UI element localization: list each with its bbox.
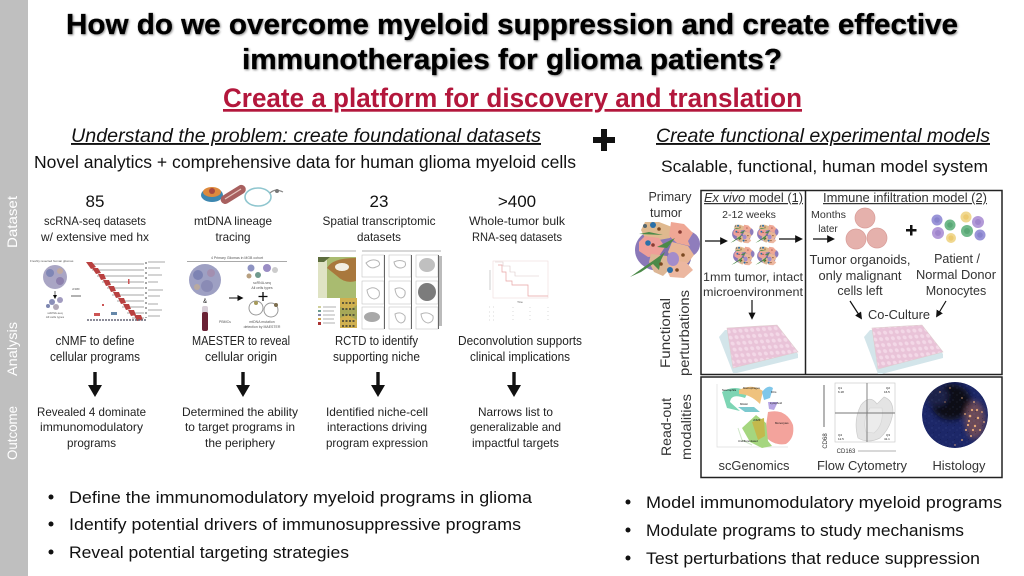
figure: MAESTER workflow — [187, 256, 287, 331]
label: functional perturbations — [657, 290, 692, 376]
title: How do we overcome myeloid suppression and create effective — [66, 9, 958, 41]
icon: well plate 1 — [719, 325, 798, 373]
arrow — [507, 372, 521, 397]
label: scGenomics: scGenomics — [718, 459, 790, 473]
chart: flow cytometry: Q3 — [886, 433, 890, 437]
label: read-out modalities: modalities — [678, 394, 694, 460]
left bullet list: Reveal potential targeting strategies — [69, 544, 349, 562]
title — [66, 9, 958, 76]
panel: column 1 scRNA-seq: programs — [67, 436, 116, 450]
figure: MAESTER workflow: & — [203, 299, 207, 305]
panel: column 2 mtDNA: to target programs in — [185, 420, 295, 434]
panel: column 4 bulk — [458, 192, 582, 450]
icon: tumor organoids — [846, 208, 887, 249]
figure: cNMF heatmap: All cells types — [46, 315, 65, 319]
right bullet list — [626, 494, 1002, 568]
panel: column 3 spatial — [318, 192, 442, 450]
panel: column 2 mtDNA: MAESTER to reveal — [192, 334, 290, 348]
figure: cNMF heatmap: scRNA-seq — [47, 311, 63, 315]
arrow: to plate 1 — [751, 300, 753, 318]
label: months later — [811, 210, 846, 235]
label: tumor description — [703, 270, 804, 299]
panel: column 1 scRNA-seq — [30, 192, 165, 450]
panel: column 3 spatial: datasets — [357, 230, 401, 244]
figure: cNMF heatmap: Freshly resected human gliomas — [30, 259, 74, 263]
label: read-out modalities: Read-out — [658, 398, 674, 456]
chart: flow cytometry: 12.5 — [838, 437, 844, 441]
sidebar: stage labels: Dataset — [4, 196, 20, 248]
panel: column 4 bulk: generalizable and — [470, 420, 561, 434]
chart: scGenomics UMAP: Undifferentiated — [738, 439, 758, 443]
label: primary tumor: tumor — [650, 206, 682, 220]
label: tumor organoids: only malignant — [818, 269, 902, 283]
left subheading: Novel analytics + comprehensive data for human glioma myeloid cells — [34, 152, 576, 172]
chart: scGenomics UMAP: Mitotic — [740, 402, 749, 406]
panel: column 4 bulk: >400 — [498, 192, 536, 211]
left bullet list: Define the immunomodulatory myeloid programs in glioma — [69, 489, 533, 507]
figure: MAESTER workflow: scRNA-seq — [253, 281, 271, 285]
label: read-out modalities — [658, 394, 694, 460]
panel: read-out modalities — [701, 377, 1002, 478]
label: tumor description: microenvironment — [703, 285, 804, 299]
label: primary tumor: Primary — [648, 190, 692, 204]
panel: column 4 bulk: clinical implications — [470, 350, 570, 364]
label: monocytes: Patient / — [934, 252, 980, 266]
panel: column 2 mtDNA: mtDNA lineage — [194, 214, 272, 228]
chart: scGenomics UMAP: cNMF — [753, 418, 761, 422]
sidebar: stage labels — [0, 0, 28, 576]
figure: spatial maps — [318, 251, 442, 329]
label: monocytes: Monocytes — [926, 284, 986, 298]
panel: column 4 bulk: Deconvolution supports — [458, 334, 582, 348]
panel: column 1 scRNA-seq: cNMF to define — [56, 334, 135, 348]
panel: experimental models — [630, 190, 1002, 375]
chart: flow cytometry: Q2 — [886, 386, 890, 390]
right bullet list: Modulate programs to study mechanisms — [646, 522, 964, 540]
right subheading: Scalable, functional, human model system — [661, 157, 988, 176]
panel: column 2 mtDNA: Determined the ability — [182, 405, 298, 419]
panel: column 2 mtDNA: cellular origin — [205, 350, 277, 364]
right bullet list: Model immunomodulatory myeloid programs — [646, 494, 1002, 512]
figure: MAESTER workflow: mtDNA mutation — [249, 320, 275, 324]
icon: well plate 2 — [864, 325, 943, 374]
label: tumor description: 1mm tumor, intact — [703, 270, 804, 284]
label: months later: later — [818, 224, 838, 235]
chart: survival curve: Time — [517, 301, 523, 304]
label: co-culture: Co-Culture — [868, 308, 930, 322]
chart: scGenomics UMAP: DCs — [771, 390, 777, 394]
panel: column 1 scRNA-seq: w/ extensive med hx — [40, 230, 149, 244]
panel: column 3 spatial: Identified niche-cell — [326, 405, 428, 419]
right bullet list: Test perturbations that reduce suppression — [646, 550, 980, 568]
label: tumor organoids — [810, 253, 910, 298]
panel: column 2 mtDNA: tracing — [216, 230, 250, 244]
chart: scGenomics UMAP — [717, 384, 793, 448]
figure: MAESTER workflow: 4 Primary Gliomas in MGB cohort — [211, 256, 263, 260]
panel: column 1 scRNA-seq: scRNA-seq datasets — [44, 214, 146, 228]
panel: column 3 spatial: supporting niche — [333, 350, 420, 364]
panel: column 1 scRNA-seq: immunomodulatory — [40, 420, 143, 434]
panel: column 4 bulk: Whole-tumor bulk — [469, 214, 566, 228]
panel: column 4 bulk: impactful targets — [472, 436, 559, 450]
label: ex vivo model: Ex vivo model (1) — [704, 191, 803, 205]
label: monocytes — [916, 252, 996, 298]
chart: flow cytometry: CD68 — [823, 433, 829, 449]
figure: cNMF heatmap — [30, 259, 165, 321]
label: histology: Histology — [932, 459, 986, 473]
label: months later: Months — [811, 210, 846, 221]
chart: flow cytometry: 16.5 — [884, 390, 890, 394]
arrow: fragments to organoid model — [779, 238, 801, 240]
label: immune infiltration model: Immune infiltration model (2) — [823, 191, 987, 205]
icon: tumor fragments — [730, 225, 779, 265]
arrow: tumor to ex vivo — [705, 240, 726, 242]
panel: column 3 spatial: Spatial transcriptomic — [322, 214, 436, 228]
left bullet list — [48, 489, 533, 562]
icon: primary tumor — [630, 222, 700, 278]
heading: functional models: Create functional experimental models — [656, 126, 991, 147]
chart: survival curve — [489, 261, 548, 320]
chart: scGenomics UMAP: Neutrophils — [722, 388, 737, 392]
image: histology section — [922, 382, 988, 448]
chart: flow cytometry: Q1 — [838, 386, 842, 390]
chart: scGenomics UMAP: Macrophages — [743, 386, 761, 390]
panel: column 2 mtDNA: the periphery — [205, 436, 275, 450]
chart: flow cytometry: 6.18 — [838, 390, 844, 394]
label: monocytes: Normal Donor — [916, 268, 996, 282]
icon: cell, mitochondrion and DNA ring — [201, 183, 283, 206]
panel: column 1 scRNA-seq: 85 — [86, 192, 104, 211]
chart: scGenomics UMAP: Lymphoid — [770, 401, 782, 405]
panel: column 3 spatial: 23 — [370, 192, 388, 211]
label: tumor organoids: Tumor organoids, — [810, 253, 910, 267]
panel: column 1 scRNA-seq: Revealed 4 dominate — [37, 405, 146, 419]
label: tumor organoids: cells left — [837, 284, 883, 298]
figure: MAESTER workflow: PBMCs — [219, 320, 231, 324]
chart: scGenomics UMAP: Monocytes — [775, 421, 789, 425]
arrow — [88, 372, 102, 397]
chart: flow cytometry: Q4 — [838, 433, 842, 437]
sidebar: stage labels: Outcome — [4, 406, 20, 460]
panel: column 4 bulk: RNA-seq datasets — [472, 230, 562, 244]
subtitle: Create a platform for discovery and translation — [223, 83, 802, 113]
label: functional perturbations: Functional — [657, 298, 673, 368]
panel: column 3 spatial: RCTD to identify — [335, 334, 419, 348]
chart: flow cytometry — [823, 383, 896, 455]
figure: MAESTER workflow: detection by MAESTER — [244, 325, 281, 329]
arrow: monocytes to co-culture — [937, 301, 946, 316]
icon: monocytes — [932, 212, 986, 243]
panel: column 4 bulk: Narrows list to — [478, 405, 553, 419]
panel: column 1 scRNA-seq: cellular programs — [50, 350, 140, 364]
chart: flow cytometry: CD163 — [837, 449, 856, 455]
label: flow cytometry: Flow Cytometry — [817, 459, 908, 473]
title: immunotherapies for glioma patients? — [242, 44, 782, 76]
left bullet list: Identify potential drivers of immunosuppressive programs — [69, 516, 521, 534]
figure: cNMF heatmap: cNMF — [72, 287, 80, 291]
panel: column 3 spatial: interactions driving — [327, 420, 427, 434]
label: primary tumor — [648, 190, 692, 220]
arrow — [371, 372, 385, 397]
panel: column 3 spatial: program expression — [326, 436, 428, 450]
label: functional perturbations: perturbations — [676, 290, 692, 376]
icon: plus — [906, 225, 916, 236]
icon: plus sign — [593, 129, 615, 151]
arrow — [236, 372, 250, 397]
sidebar: stage labels: Analysis — [4, 322, 20, 376]
figure: MAESTER workflow: All cells types — [251, 286, 273, 290]
heading: foundational datasets: Understand the problem: create foundational datasets — [71, 126, 542, 147]
arrow: organoids to co-culture — [850, 301, 861, 318]
label: 2-12 weeks: 2-12 weeks — [722, 209, 776, 221]
panel: column 2 mtDNA — [182, 183, 298, 450]
chart: flow cytometry: 41.1 — [884, 437, 890, 441]
arrow: months later — [813, 238, 833, 240]
